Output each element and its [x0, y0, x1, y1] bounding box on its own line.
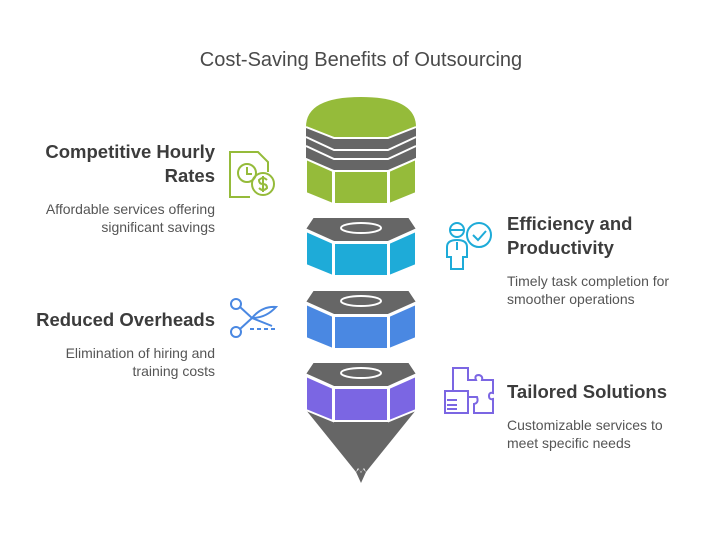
text: tailored solutions: Customizable services to meet specific needs — [507, 417, 663, 451]
text: tailored solutions — [507, 381, 667, 451]
green top — [306, 97, 416, 204]
text: reduced overheads: Elimination of hiring and training costs — [66, 345, 215, 379]
text: efficiency: Efficiency and Productivity — [507, 213, 632, 258]
cone — [306, 410, 416, 472]
icon: puzzle — [445, 368, 493, 413]
text: competitive hourly rates: Competitive Hourly Rates — [45, 141, 215, 186]
title: Cost-Saving Benefits of Outsourcing — [200, 49, 522, 71]
text: efficiency: Timely task completion for smoother operations — [507, 273, 669, 307]
icon: scissors — [231, 299, 277, 337]
text: reduced overheads — [36, 309, 215, 379]
icon: clock dollar document — [230, 152, 274, 197]
text: reduced overheads: Reduced Overheads — [36, 309, 215, 330]
text: competitive hourly rates — [45, 141, 215, 235]
text: efficiency — [507, 213, 669, 307]
text: competitive hourly rates: Affordable services offering significant savings — [46, 201, 215, 235]
nuts — [305, 217, 417, 276]
icon: person check — [447, 223, 491, 269]
text: tailored solutions: Tailored Solutions — [507, 381, 667, 402]
